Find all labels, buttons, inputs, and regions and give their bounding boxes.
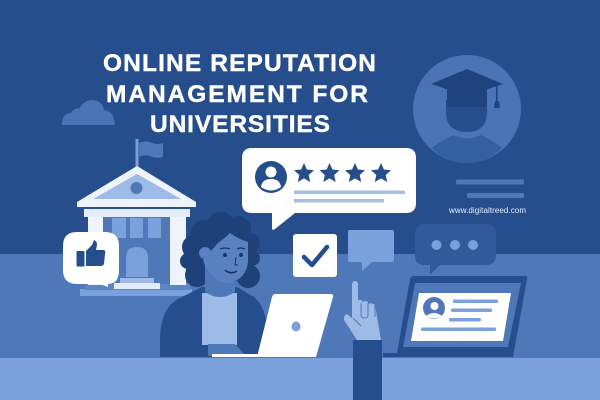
- title: [103, 50, 376, 138]
- illustration: laptop with profile: [383, 276, 527, 357]
- icon: pointing hand: [344, 281, 382, 400]
- icon: review speech bubble: [242, 148, 416, 230]
- stars: [294, 163, 391, 182]
- icon: blue chat bubble: [348, 230, 394, 271]
- icon: university building: [77, 139, 196, 296]
- laptop: [212, 354, 258, 357]
- text lines: [294, 190, 405, 194]
- title: ONLINE REPUTATION: [103, 50, 376, 77]
- cardigan: [160, 287, 267, 357]
- icon: check box: [293, 234, 337, 277]
- icon: graduate avatar: [413, 55, 521, 163]
- profile lines: [453, 300, 498, 303]
- hands: [208, 344, 246, 356]
- illustration: woman at laptop: [160, 212, 333, 357]
- shirt: [202, 293, 237, 345]
- icon: cloud: [62, 100, 115, 125]
- neck: [205, 265, 235, 297]
- face: [203, 233, 248, 283]
- icon: dark chat bubble: [415, 224, 496, 274]
- website url: www.digitaltreed.com: [448, 206, 526, 215]
- title: MANAGEMENT FOR: [106, 81, 368, 108]
- decorative text lines: [456, 180, 524, 198]
- icon: thumbs up bubble: [63, 232, 119, 287]
- hair: [180, 212, 260, 288]
- title: UNIVERSITIES: [150, 111, 330, 138]
- avatar: [255, 161, 287, 193]
- profile avatar: [423, 297, 445, 319]
